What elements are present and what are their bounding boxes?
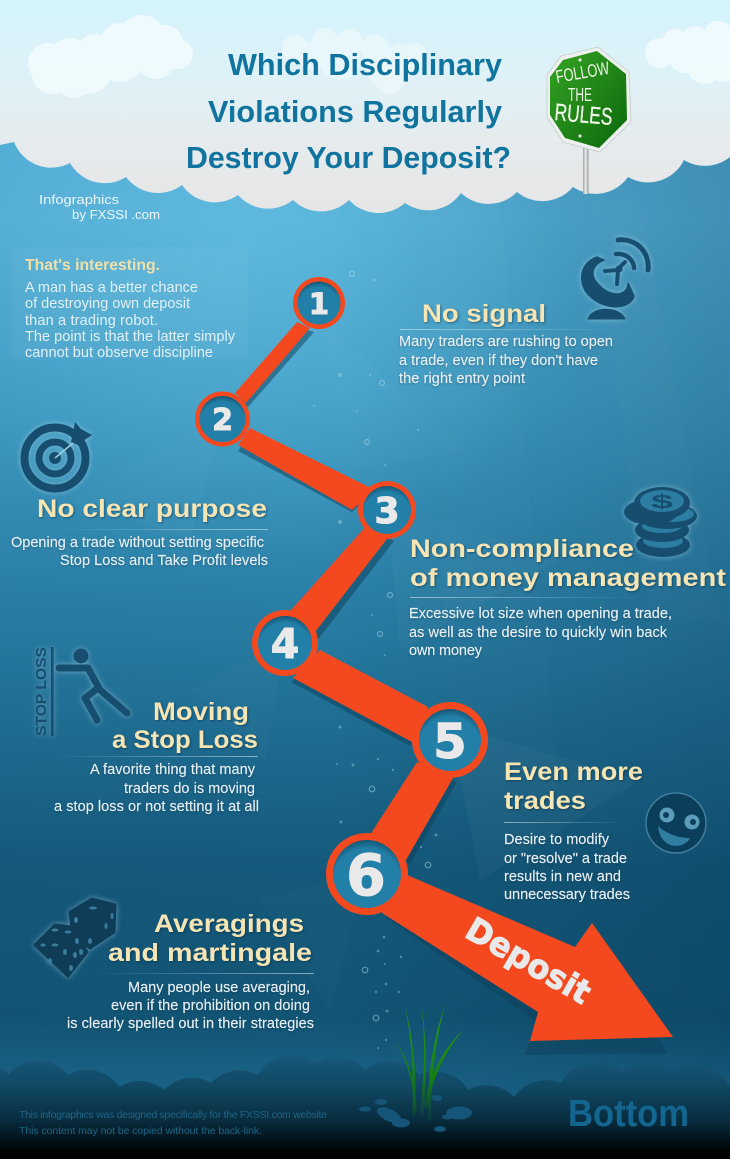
footer note	[19, 1109, 327, 1137]
icon: dice	[35, 899, 115, 976]
panel: that's interesting	[12, 247, 248, 361]
follow the rules sign: RULES	[553, 99, 614, 131]
heading: even more trades: or "resolve" a trade	[504, 851, 627, 867]
step 5	[412, 702, 488, 778]
title: Violations Regularly	[208, 94, 503, 129]
heading: money management	[409, 535, 727, 659]
follow the rules sign	[547, 47, 631, 194]
sky and big cloud	[0, 0, 730, 213]
heading: even more trades: results in new and	[504, 869, 621, 885]
heading: money management: own money	[409, 643, 483, 659]
bottom label: Bottom	[568, 1093, 689, 1135]
step 6: 6	[346, 843, 386, 909]
footer note: This infographics was designed specifically for the FXSSI.com website	[19, 1109, 327, 1121]
panel: that's interesting: of destroying own deposit	[25, 296, 190, 312]
heading: averagings and martingale: and martingale	[108, 939, 312, 967]
credit: by FXSSI .com	[72, 207, 160, 222]
heading: even more trades: Even more	[504, 758, 643, 786]
step 4: 4	[271, 620, 299, 668]
heading: averagings and martingale: is clearly spelled out in their strategies	[67, 1016, 314, 1032]
icon: stop loss figure	[33, 647, 127, 736]
heading: averagings and martingale: Many people use averaging,	[128, 980, 310, 996]
follow the rules sign: THE	[568, 85, 592, 105]
panel: that's interesting: cannot but observe discipline	[25, 345, 213, 361]
panel: that's interesting: A man has a better chance	[25, 280, 198, 296]
step 2: 2	[212, 403, 233, 438]
heading: money management: Non-compliance	[410, 535, 634, 563]
deposit label: Deposit	[459, 909, 598, 1012]
panel: that's interesting: That's interesting.	[25, 257, 160, 274]
stones	[359, 1095, 472, 1132]
small clouds	[28, 15, 730, 98]
step 1	[293, 277, 345, 329]
icon: coins	[624, 487, 697, 557]
title: Destroy Your Deposit?	[186, 140, 511, 175]
step 3	[358, 481, 416, 539]
heading: no signal	[399, 300, 620, 387]
icon: stop loss figure: STOP LOSS	[33, 647, 50, 736]
step 1: 1	[309, 287, 329, 321]
heading: money management: of money management	[410, 564, 727, 592]
follow the rules sign: FOLLOW	[554, 58, 611, 87]
step 4	[252, 610, 318, 676]
heading: no clear purpose	[11, 495, 268, 569]
footer note: This content may not be copied without the back-link.	[19, 1125, 262, 1137]
icon: smiley	[646, 793, 706, 853]
heading: averagings and martingale: even if the prohibition on doing	[111, 998, 310, 1014]
heading: even more trades: unnecessary trades	[504, 887, 630, 903]
credit	[39, 192, 160, 222]
heading: no clear purpose: Opening a trade without setting specific	[11, 535, 264, 551]
heading: no clear purpose: Stop Loss and Take Profit levels	[60, 553, 268, 569]
heading: even more trades: trades	[504, 787, 586, 815]
heading: moving a stop loss: a Stop Loss	[112, 726, 258, 754]
seaweed	[396, 1003, 463, 1120]
title: Which Disciplinary	[228, 47, 503, 82]
heading: averagings and martingale	[67, 910, 314, 1032]
title	[186, 47, 511, 175]
heading: no signal: the right entry point	[399, 371, 525, 387]
sea floor	[0, 1055, 730, 1159]
panel: that's interesting: The point is that the latter simply	[25, 329, 236, 345]
step 6	[326, 833, 408, 915]
heading: moving a stop loss: traders do is moving	[124, 781, 255, 797]
icon: coins: $	[651, 492, 674, 513]
heading: no signal: No signal	[422, 300, 546, 328]
heading: even more trades: Desire to modify	[504, 832, 610, 848]
zigzag path arrow	[235, 322, 673, 1055]
step 3: 3	[374, 491, 400, 532]
heading: moving a stop loss	[50, 698, 259, 815]
bubbles	[313, 272, 438, 1049]
credit: Infographics	[39, 192, 120, 207]
icon: target	[24, 422, 92, 488]
icon: satellite dish	[582, 240, 648, 319]
heading: even more trades	[504, 758, 643, 903]
heading: money management: as well as the desire to quickly win back	[409, 625, 668, 641]
heading: no signal: a trade, even if they don't have	[399, 353, 598, 369]
heading: moving a stop loss: Moving	[153, 698, 249, 726]
step 5: 5	[433, 714, 467, 770]
panel: that's interesting: than a trading robot.	[25, 313, 158, 329]
heading: no clear purpose: No clear purpose	[37, 495, 267, 523]
heading: moving a stop loss: a stop loss or not setting it at all	[54, 799, 259, 815]
step 2	[195, 392, 250, 446]
heading: moving a stop loss: A favorite thing that many	[90, 762, 256, 778]
heading: no signal: Many traders are rushing to open	[399, 334, 613, 350]
heading: averagings and martingale: Averagings	[154, 910, 304, 938]
heading: money management: Excessive lot size when opening a trade,	[409, 606, 672, 622]
